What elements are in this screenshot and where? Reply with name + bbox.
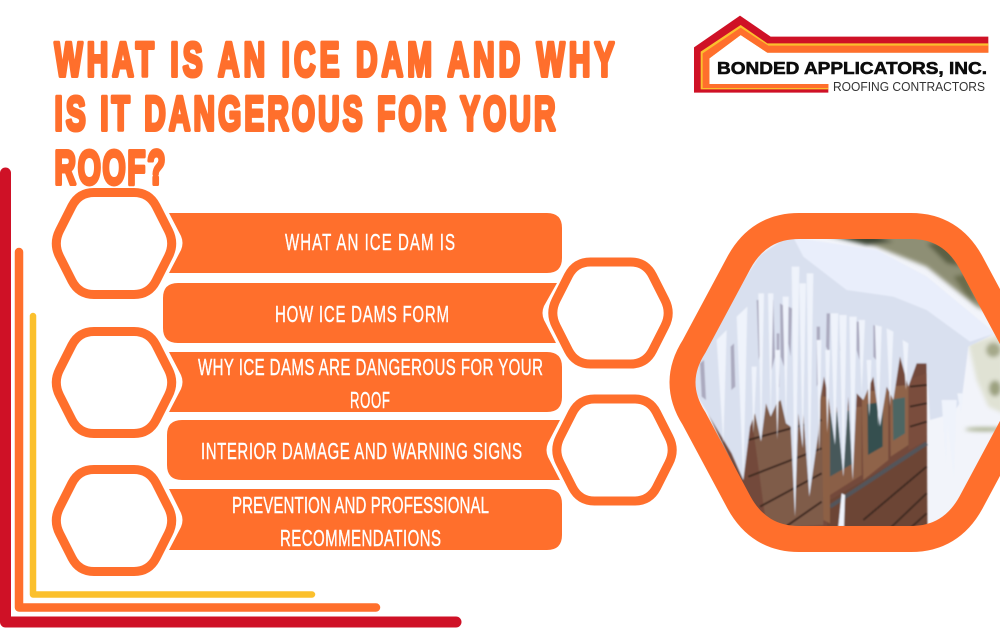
row 4: interior damage and warning signs: INTERIOR DAMAGE AND WARNING SIGNS — [201, 439, 522, 465]
icicles — [717, 267, 963, 527]
wall planks — [748, 385, 927, 528]
hexagon outline 2 — [553, 262, 668, 364]
logo: Bonded Applicators — [694, 16, 988, 94]
row 1: what an ice dam is — [169, 213, 562, 273]
title — [54, 34, 614, 195]
row 5: prevention and professional recommendations: PREVENTION AND PROFESSIONAL — [232, 493, 489, 519]
row 3: why ice dams are dangerous: ROOF — [350, 388, 390, 414]
streaks in the ice — [700, 300, 877, 400]
title: ROOF? — [54, 142, 165, 195]
row 2: how ice dams form — [163, 283, 557, 343]
row 3: why ice dams are dangerous: WHY ICE DAMS ARE DANGEROUS FOR YOUR — [198, 355, 543, 381]
smooth upper snow — [793, 237, 995, 342]
row 4: interior damage and warning signs — [167, 420, 560, 480]
row 5: prevention and professional recommendations — [169, 489, 562, 552]
row 1: what an ice dam is: WHAT AN ICE DAM IS — [285, 230, 455, 256]
logo: Bonded Applicators: BONDED APPLICATORS, INC. — [717, 58, 987, 78]
orange corner line — [19, 252, 376, 608]
windows — [822, 397, 830, 523]
photo: icicles hanging from a snowy cabin roof, in hexagon frame — [680, 226, 1000, 563]
hexagon outline 1 — [56, 192, 172, 294]
ice mass on the roof edge — [692, 237, 995, 517]
hexagon outline 5 — [56, 470, 172, 572]
hexagon outline 3 — [56, 332, 172, 434]
title: WHAT IS AN ICE DAM AND WHY — [54, 34, 614, 87]
row 3: why ice dams are dangerous — [169, 352, 562, 414]
title: IS IT DANGEROUS FOR YOUR — [54, 88, 556, 141]
yellow corner line — [33, 316, 312, 594]
hexagon outline 4 — [557, 399, 672, 501]
orange hexagon frame — [682, 226, 1000, 539]
row 2: how ice dams form: HOW ICE DAMS FORM — [275, 302, 449, 328]
cabin wall — [708, 356, 928, 526]
red corner line — [6, 173, 456, 622]
row 5: prevention and professional recommendations: RECOMMENDATIONS — [280, 526, 441, 552]
logo: Bonded Applicators: ROOFING CONTRACTORS — [833, 80, 985, 94]
